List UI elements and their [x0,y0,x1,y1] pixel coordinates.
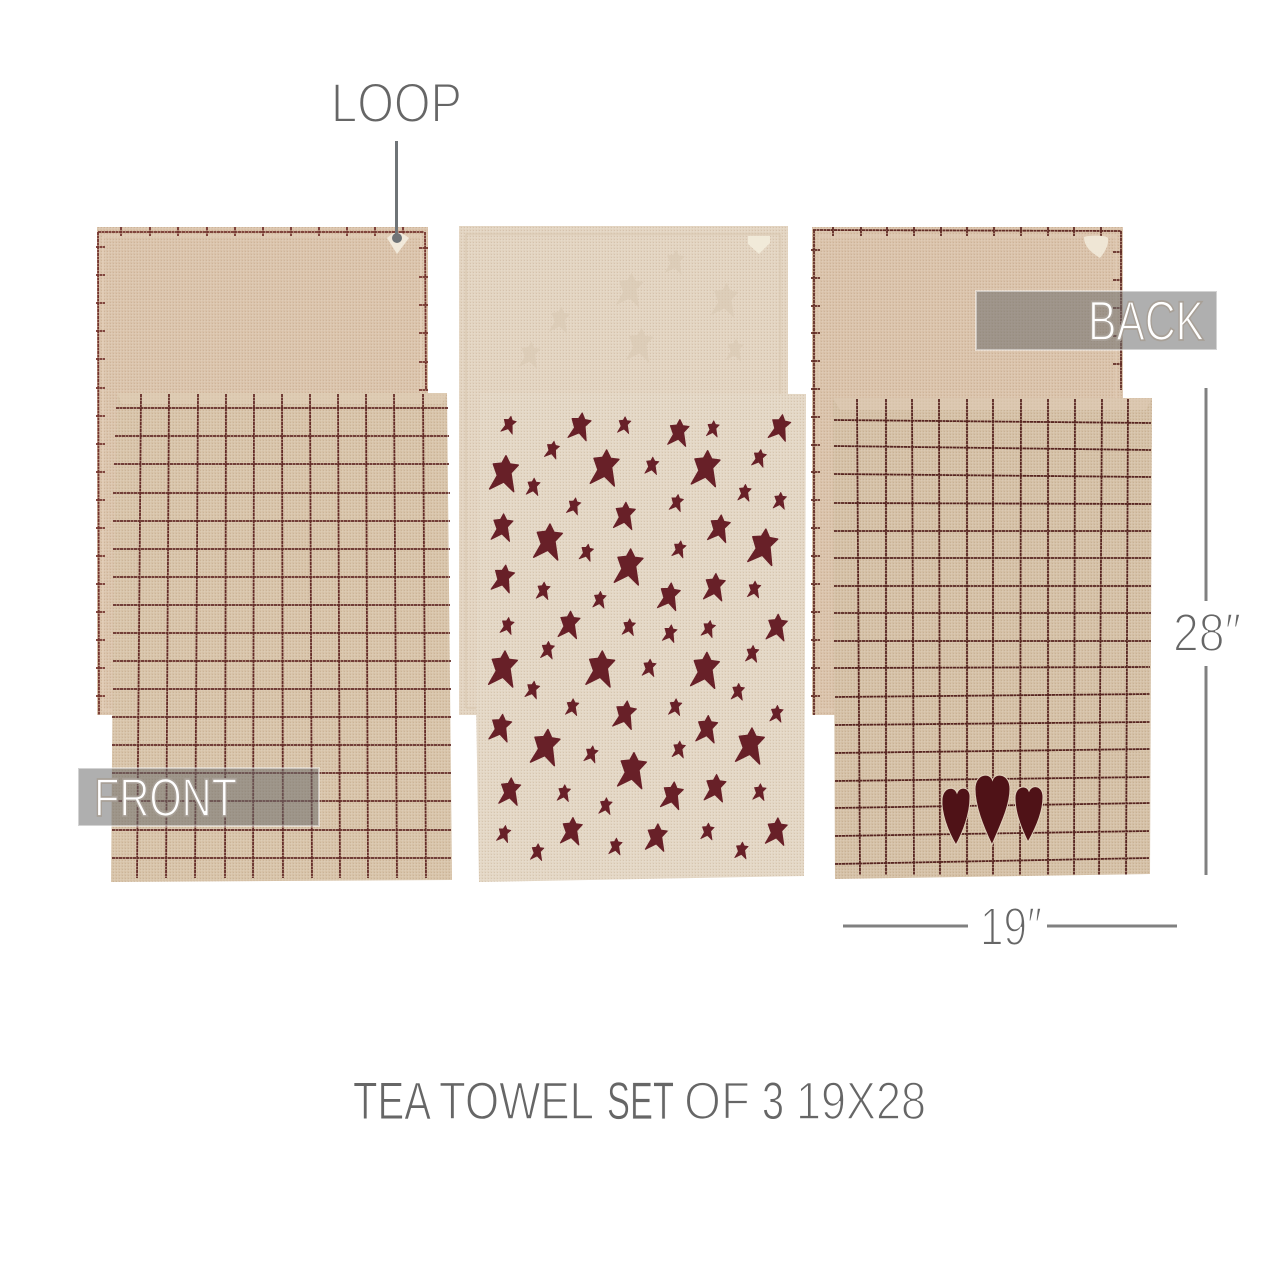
title: 19X28 [796,1072,926,1131]
stars: upper half [490,412,791,643]
label: BACK: BACK [1088,289,1204,352]
label: FRONT: FRONT [94,768,237,828]
title: TOWEL [439,1072,594,1131]
title: SET [607,1072,674,1131]
loop tag: right [1084,236,1108,258]
label: LOOP: LOOP [331,71,462,134]
loop tag: center [748,236,770,254]
dimension: height 28 inches: 28″ [1173,603,1241,663]
stitched border: back left [96,227,428,715]
towel: front right with windowpane check and hearts [833,398,1152,879]
title: 3 [762,1072,784,1131]
towel: front left with windowpane check [111,393,452,882]
label: BACK [976,289,1217,352]
title [353,1072,926,1131]
loop tag: left [387,233,409,254]
title: OF [684,1072,750,1131]
hearts [942,775,1043,845]
stitched border: back right [811,227,1122,715]
towel: back left [96,227,428,715]
check lines: front left [112,394,451,878]
towel: back right [811,227,1123,715]
title: TEA [353,1072,431,1131]
stars: lower half [489,641,787,861]
pointer: LOOP leader line [392,141,402,243]
towel: front center with star print [476,393,806,882]
faint reversed stars [519,250,744,369]
check lines: front right [834,399,1151,875]
dimension: width 19 inches: 19″ [980,897,1042,957]
towel: back center [459,226,788,715]
